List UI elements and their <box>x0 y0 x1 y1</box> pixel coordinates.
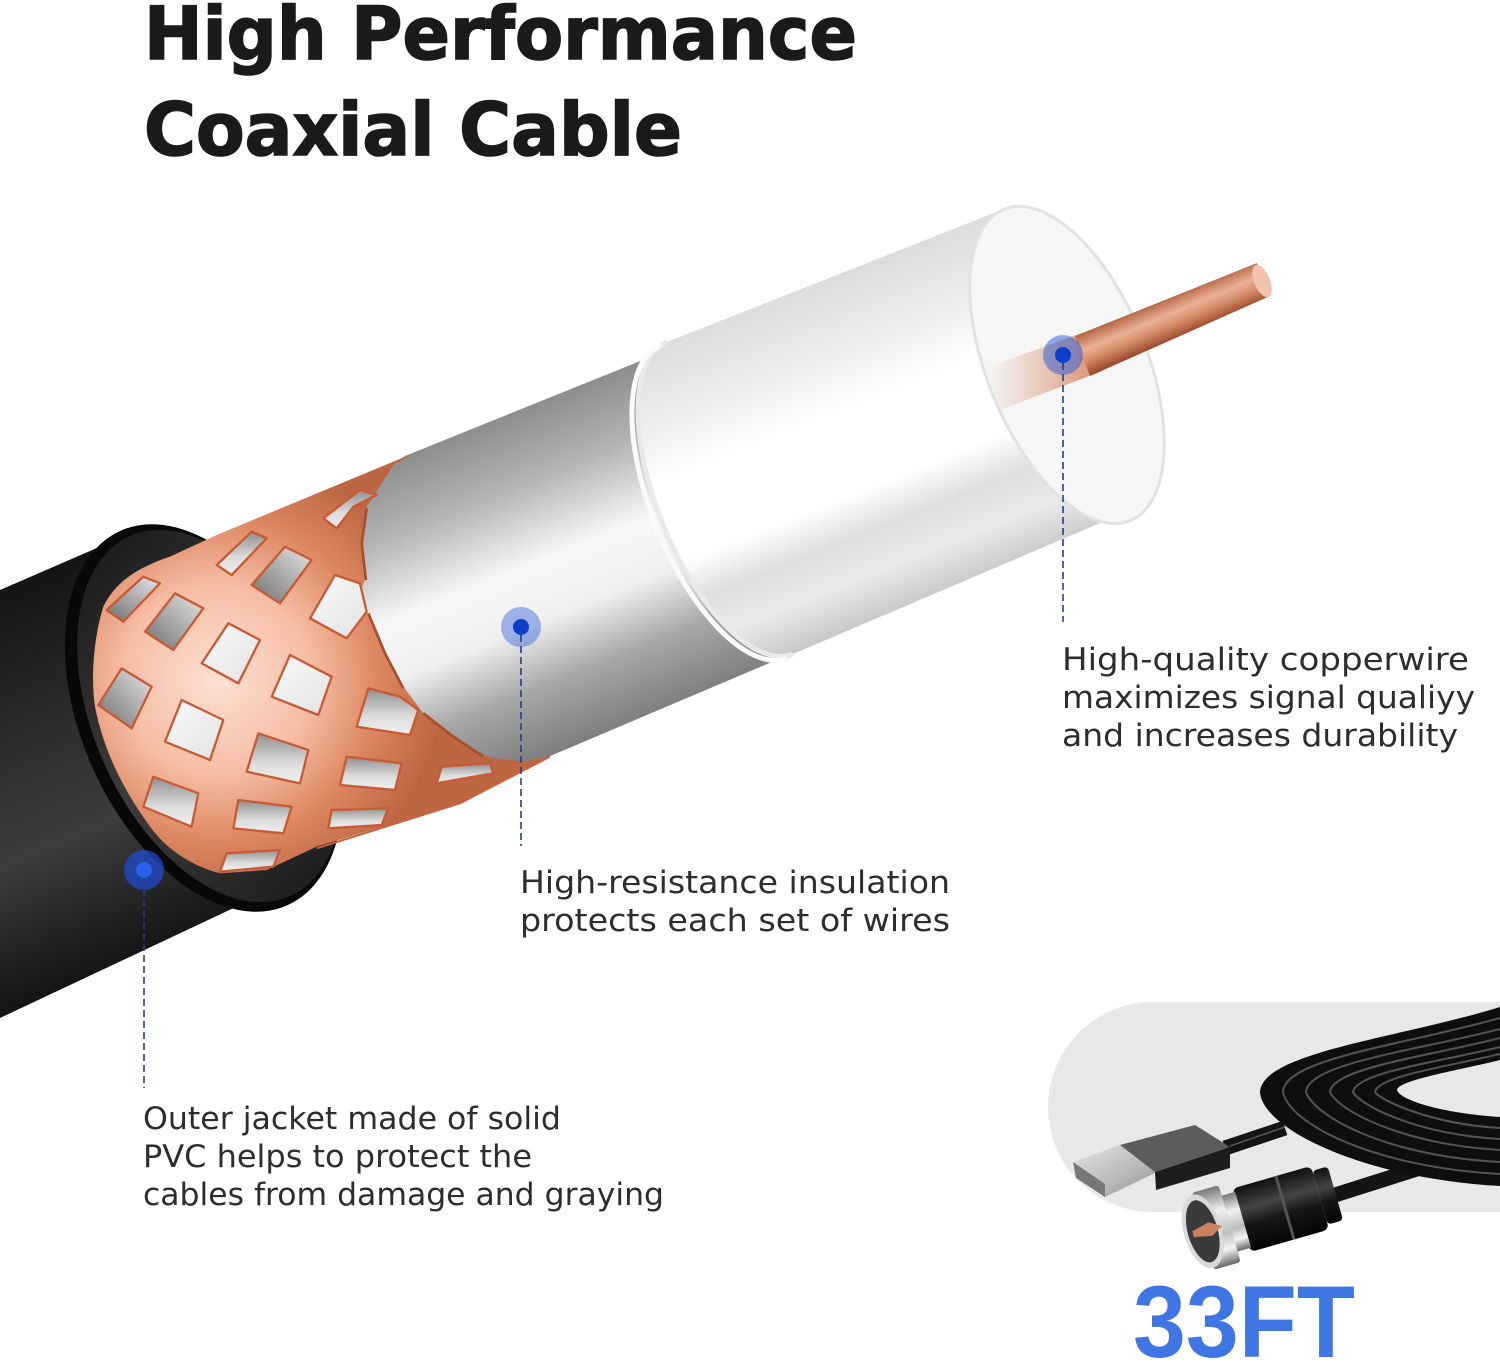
label: High-resistance insulation <box>520 865 950 901</box>
leader line <box>520 635 522 846</box>
cable tails <box>1225 1127 1420 1195</box>
label: cables from damage and graying <box>143 1177 664 1213</box>
white dielectric cylinder <box>632 179 1204 660</box>
USB plug <box>1073 1125 1230 1197</box>
label <box>143 1101 664 1213</box>
cable coil <box>1260 1007 1500 1186</box>
callout: outer jacket <box>124 850 664 1213</box>
label <box>1062 642 1475 754</box>
title <box>144 0 857 173</box>
label: maximizes signal qualiyy <box>1062 680 1475 716</box>
product photo: coiled cable <box>1048 1002 1500 1275</box>
callout: insulation <box>501 607 950 939</box>
braid openings <box>98 490 493 872</box>
cable cutaway illustration <box>0 179 1276 1018</box>
leader line <box>143 878 145 1088</box>
copper braided shield <box>93 453 550 873</box>
callout: copper wire <box>1043 335 1475 754</box>
F connector <box>1173 1155 1346 1275</box>
grey insulation layer <box>340 345 800 775</box>
marker dot <box>501 607 541 647</box>
outer black jacket <box>0 481 399 1018</box>
label: Outer jacket made of solid <box>143 1101 561 1137</box>
label <box>520 865 950 939</box>
label: protects each set of wires <box>520 903 950 939</box>
label: High-quality copperwire <box>1062 642 1469 678</box>
copper core wire <box>985 262 1276 410</box>
marker dot <box>124 850 164 890</box>
title: Coaxial Cable <box>144 88 682 173</box>
label: PVC helps to protect the <box>143 1139 532 1175</box>
label: and increases durability <box>1062 718 1458 754</box>
marker dot <box>1043 335 1083 375</box>
leader line <box>1062 363 1064 622</box>
grey backdrop pill <box>1048 1002 1500 1212</box>
